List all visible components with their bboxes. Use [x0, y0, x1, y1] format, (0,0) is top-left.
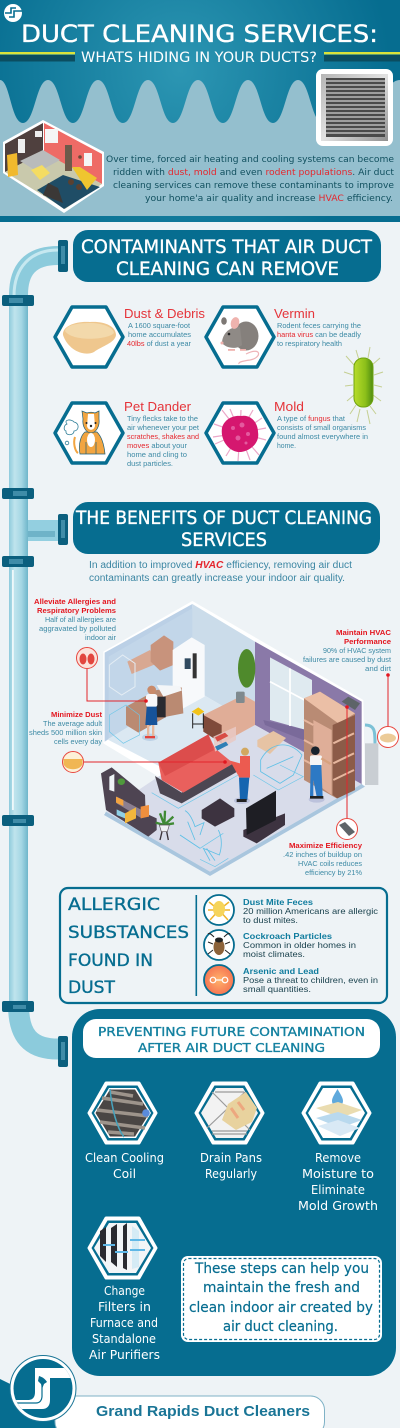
label: change filters: Air Purifiers	[89, 1348, 160, 1362]
title: DUCT CLEANING SERVICES:	[21, 20, 378, 48]
heading: contaminants: CONTAMINANTS THAT AIR DUCT	[81, 236, 372, 258]
panel: allergic substances	[60, 888, 387, 1003]
item: vermin: to respiratory health	[277, 339, 342, 348]
callout: closing message: air duct cleaning.	[223, 1319, 338, 1335]
leader line	[84, 761, 225, 763]
label: change filters: Filters in	[98, 1300, 151, 1314]
illustration: isometric room	[101, 601, 378, 876]
leader line	[87, 669, 146, 701]
wire chairs	[180, 811, 204, 848]
callout: maintain HVAC: 90% of HVAC system	[323, 646, 391, 655]
pipe	[2, 240, 68, 1067]
label: drain pans regularly: Drain Pans	[200, 1151, 262, 1165]
heading: allergic substances: FOUND IN	[68, 951, 153, 971]
item: dust and debris: home accumulates	[128, 330, 191, 339]
item: arsenic and lead: Arsenic and Lead	[243, 966, 319, 976]
item: arsenic and lead: Pose a threat to children, even in	[243, 975, 378, 985]
leader dot	[223, 760, 227, 764]
benefits intro	[89, 560, 352, 584]
callout: closing message: These steps can help you	[194, 1261, 369, 1277]
pipe collar 5	[2, 1001, 34, 1012]
blue floor guides	[152, 765, 303, 867]
potted plant	[156, 811, 174, 840]
vent panel	[342, 697, 360, 710]
icon: dust circle	[378, 726, 398, 748]
item: mold: consists of small organisms	[277, 423, 366, 432]
duct wave shape	[0, 80, 400, 216]
item: mold: Mold	[274, 399, 304, 414]
faint wire cabinet	[109, 655, 135, 695]
stool	[193, 713, 203, 728]
heading: preventing contamination	[83, 1019, 380, 1058]
item: pet dander: air whenever your pet	[127, 423, 199, 432]
label: clean cooling coil: Coil	[113, 1167, 136, 1181]
footer logo	[10, 1356, 76, 1422]
callout: closing message: clean indoor air created by	[189, 1300, 373, 1316]
callout: maintain HVAC	[303, 628, 398, 748]
magazines	[213, 727, 236, 752]
icon: dust mite	[204, 895, 234, 925]
label: remove moisture: Mold Growth	[298, 1199, 378, 1213]
heading: allergic substances: SUBSTANCES	[68, 923, 189, 943]
fridge	[173, 637, 205, 708]
pipe collar 3	[2, 556, 34, 567]
item: dust mite feces: Dust Mite Feces	[243, 897, 313, 907]
icon: cockroach	[204, 930, 234, 960]
item: dust mite feces	[243, 897, 379, 925]
heading: benefits	[73, 502, 380, 554]
item: cockroach particles	[243, 931, 356, 959]
icon: moisture layers	[303, 1083, 370, 1143]
title	[21, 20, 378, 66]
label: remove moisture: Moisture to	[302, 1167, 374, 1181]
pipe flange: bottom	[58, 1036, 68, 1067]
leader dot: allergies	[144, 699, 148, 703]
callout: maintain HVAC: Performance	[344, 637, 391, 646]
icon: mold spore	[213, 409, 266, 461]
callout: maintain HVAC: Maintain HVAC	[336, 628, 391, 637]
icon: coil	[336, 818, 358, 840]
label: change filters	[89, 1284, 160, 1362]
callout: minimize dust: The average adult	[43, 719, 102, 728]
item: dust and debris	[55, 306, 205, 367]
icon: dog	[64, 411, 105, 454]
leader dot	[386, 673, 390, 677]
callout: closing message: maintain the fresh and	[203, 1280, 360, 1296]
callout: allergies: aggravated by polluted	[39, 624, 116, 633]
label: drain pans regularly	[200, 1151, 262, 1181]
callout: allergies	[34, 597, 146, 701]
island	[203, 695, 255, 743]
leader dot	[345, 705, 349, 709]
item: vermin: hanta virus can be deadly	[277, 330, 361, 339]
item: dust and debris: Dust & Debris	[124, 306, 205, 321]
wire armchair	[261, 745, 302, 783]
planks	[257, 731, 286, 754]
item: cockroach particles: moist climates.	[243, 949, 305, 959]
pipe collar 4	[2, 815, 34, 826]
callout: minimize dust: cells every day	[54, 737, 102, 746]
callout: maximize efficiency: efficiency by 21%	[305, 868, 363, 877]
intro paragraph	[106, 154, 394, 204]
upper cabinets	[127, 650, 157, 674]
coffee table	[202, 798, 234, 827]
furnace	[365, 743, 378, 785]
icon: cooling coil	[89, 1083, 156, 1143]
icon: lungs	[76, 648, 98, 668]
intro paragraph: ridden with dust, mold and even rodent populations. Air duct	[113, 167, 394, 178]
callout: allergies: Half of all allergies are	[45, 615, 116, 624]
item: cockroach particles: Cockroach Particles	[243, 931, 332, 941]
callout: maximize efficiency: .42 inches of buildup on	[283, 850, 362, 859]
heading: allergic substances	[68, 895, 189, 998]
small logo	[4, 4, 22, 22]
header panel	[0, 0, 400, 222]
label: remove moisture: Eliminate	[311, 1183, 365, 1197]
label: change filters: Change	[104, 1284, 145, 1298]
pipe collar 2	[2, 488, 34, 499]
benefits intro: In addition to improved HVAC efficiency, removing air duct	[89, 560, 352, 571]
leader line	[346, 707, 348, 818]
intro paragraph: your home'a air quality and increase HVAC efficiency.	[145, 193, 393, 204]
item: mold: A type of fungus that	[277, 414, 345, 423]
label: remove moisture	[298, 1151, 378, 1213]
callout: maximize efficiency: Maximize Efficiency	[289, 841, 362, 850]
label: drain pans regularly: Regularly	[205, 1167, 257, 1181]
heading: contaminants	[73, 230, 381, 282]
plant	[238, 649, 255, 688]
callout: maximize efficiency: HVAC coils reduces	[298, 859, 362, 868]
heading: benefits: SERVICES	[181, 529, 267, 551]
kitchen counter	[126, 687, 183, 733]
item: arsenic and lead	[243, 966, 378, 994]
heading: preventing contamination: AFTER AIR DUCT CLEANING	[138, 1040, 325, 1055]
benefits intro: contaminants can greatly increase your indoor air quality.	[89, 573, 345, 584]
icon: filters	[89, 1218, 156, 1278]
item: dust and debris: A 1600 square-foot	[128, 321, 190, 330]
icon: green bacterium	[344, 347, 383, 424]
icon: isometric home	[3, 120, 104, 213]
wire cabinet blue	[109, 705, 139, 743]
subtitle stripes	[0, 52, 400, 62]
label: change filters: Furnace and	[90, 1316, 158, 1330]
item: pet dander: Tiny flecks take to the	[127, 414, 198, 423]
footer company pill	[55, 1396, 324, 1428]
heading: allergic substances: ALLERGIC	[68, 895, 160, 915]
panel: preventing contamination	[72, 1009, 396, 1376]
intro paragraph: Over time, forced air heating and cooling systems can become	[106, 154, 394, 165]
label: clean cooling coil	[85, 1151, 164, 1181]
heading: contaminants: CLEANING CAN REMOVE	[116, 258, 339, 280]
callout: maximize efficiency	[283, 705, 363, 877]
man	[230, 748, 250, 804]
shelf	[101, 767, 157, 837]
callout: minimize dust	[29, 710, 227, 772]
item: vermin: Vermin	[274, 306, 315, 321]
intro paragraph: cleaning services can remove these contaminants to improve	[113, 180, 394, 191]
item: vermin	[206, 306, 361, 367]
footer	[0, 1356, 324, 1428]
leader line	[387, 675, 389, 728]
item: pet dander: dust particles.	[127, 459, 173, 468]
pipe flange: top	[58, 240, 68, 272]
item: pet dander	[55, 399, 199, 468]
worker	[309, 746, 331, 803]
heading: allergic substances: DUST	[68, 978, 116, 998]
callout: closing message	[181, 1256, 382, 1342]
item: vermin: Rodent feces carrying the	[277, 321, 361, 330]
pipe flange: middle	[58, 514, 68, 545]
item: mold: home.	[277, 441, 296, 450]
sofa	[155, 734, 237, 803]
callout: minimize dust: Minimize Dust	[51, 710, 103, 719]
woman	[142, 686, 158, 741]
icon: arsenic and lead	[204, 965, 234, 995]
icon: drain pan	[196, 1083, 263, 1143]
icon: dust clump	[63, 322, 116, 354]
item: pet dander: scratches, shakes and	[127, 432, 199, 441]
pipe collar 1	[2, 295, 34, 306]
wardrobe	[304, 692, 355, 798]
heading: benefits: THE BENEFITS OF DUCT CLEANING	[75, 507, 372, 529]
item: cockroach particles: Common in older homes in	[243, 940, 356, 950]
icon: rodent	[220, 316, 259, 364]
label: clean cooling coil: Clean Cooling	[85, 1151, 164, 1165]
item: arsenic and lead: small quantities.	[243, 984, 311, 994]
item: mold	[206, 399, 368, 463]
TV unit	[243, 791, 285, 843]
item: dust mite feces: 20 million Americans are allergic	[243, 906, 379, 916]
item: dust and debris: 40lbs of dust a year	[127, 339, 192, 348]
footer company pill: Grand Rapids Duct Cleaners	[96, 1403, 310, 1420]
item: dust mite feces: to dust mites.	[243, 915, 298, 925]
item: pet dander: Pet Dander	[124, 399, 192, 414]
item: pet dander: moves about your	[127, 441, 188, 450]
callout: allergies: Alleviate Allergies and	[34, 597, 116, 606]
subtitle: WHATS HIDING IN YOUR DUCTS?	[81, 50, 317, 66]
icon: skin cells	[62, 752, 84, 772]
label: remove moisture: Remove	[315, 1151, 361, 1165]
callout: maintain HVAC: failures are caused by dust	[303, 655, 391, 664]
icon: air vent	[316, 69, 393, 146]
item: pet dander: home and cling to	[127, 450, 187, 459]
callout: allergies: Respiratory Problems	[37, 606, 116, 615]
callout: minimize dust: sheds 500 million skin	[29, 728, 102, 737]
label: change filters: Standalone	[92, 1332, 156, 1346]
callout: maintain HVAC: and dirt	[365, 664, 391, 673]
heading: preventing contamination: PREVENTING FUTURE CONTAMINATION	[98, 1024, 365, 1039]
callout: allergies: indoor air	[85, 633, 117, 642]
item: mold: found almost everywhere in	[277, 432, 368, 441]
